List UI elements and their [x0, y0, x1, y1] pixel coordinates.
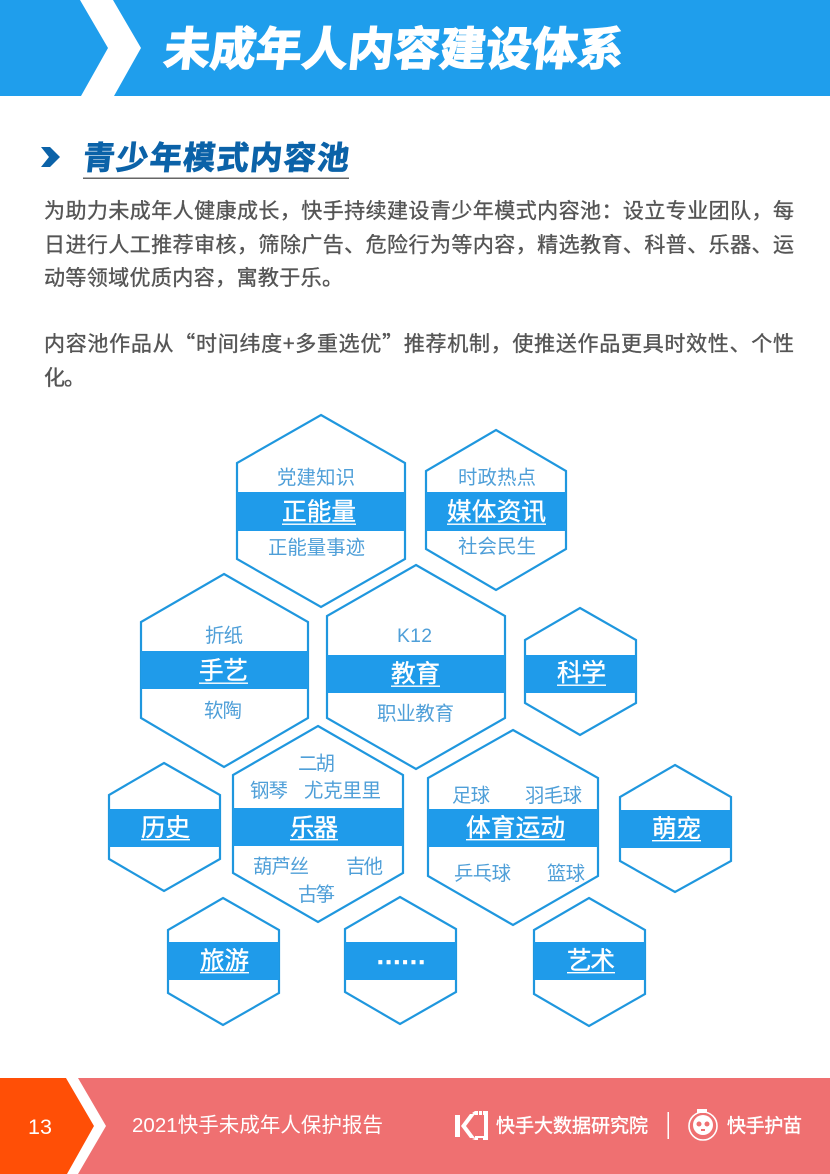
hexagon: 体育运动: 羽毛球	[525, 785, 582, 807]
hexagon: 媒体资讯: 社会民生	[458, 536, 536, 558]
hexagon: 乐器	[233, 726, 403, 922]
section heading	[41, 140, 351, 179]
hexagon: 正能量: 正能量事迹	[268, 537, 365, 559]
intro text block: 化。	[44, 362, 85, 392]
hexagon: 乐器: 乐器	[290, 814, 338, 842]
hexagon: 媒体资讯: 时政热点	[458, 467, 536, 489]
program name: 快手护苗	[727, 1115, 802, 1137]
title: 未成年人内容建设体系	[162, 24, 626, 75]
hexagon: 乐器: 尤克里里	[304, 780, 381, 802]
hexagon: 艺术: 艺术	[567, 947, 615, 975]
hexagon: ellipsis: ......	[377, 943, 425, 970]
intro text block: 日进行人工推荐审核，筛除广告、危险行为等内容，精选教育、科普、乐器、运	[44, 229, 794, 259]
hexagon: 教育: 职业教育	[377, 703, 454, 725]
hexagon: 艺术	[534, 898, 645, 1026]
page number: 13	[28, 1115, 52, 1139]
icon: mascot logo	[689, 1109, 717, 1140]
hexagon: 科学: 科学	[557, 659, 606, 687]
hexagon: 旅游: 旅游	[200, 947, 249, 975]
hexagon: 媒体资讯: 媒体资讯	[447, 498, 546, 526]
hexagon: 历史	[109, 763, 220, 891]
hexagon: 乐器: 钢琴	[250, 780, 288, 802]
intro text block: 动等领域优质内容，寓教于乐。	[44, 262, 343, 292]
hexagon: 体育运动: 足球	[452, 785, 490, 807]
hexagon: 体育运动: 体育运动	[466, 814, 565, 842]
hexagon: 手艺: 折纸	[205, 625, 243, 647]
hexagon: 正能量: 正能量	[282, 498, 356, 526]
hexagon: 手艺	[141, 574, 308, 767]
hexagon: 体育运动: 乒乓球	[454, 863, 511, 885]
hexagon: 乐器: 古筝	[298, 884, 335, 906]
hexagon: 媒体资讯	[426, 430, 566, 590]
icon: chevron	[41, 147, 60, 167]
hexagon: 萌宠	[620, 765, 731, 892]
icon: big data institute logo	[455, 1111, 488, 1140]
hexagon: 体育运动	[428, 730, 598, 925]
section title: 青少年模式内容池	[81, 140, 351, 176]
hexagon: 体育运动: 篮球	[547, 863, 585, 885]
report title: 2021快手未成年人保护报告	[132, 1114, 383, 1137]
hexagon: 正能量	[237, 415, 405, 607]
hexagon: ellipsis	[345, 897, 456, 1024]
institute name: 快手大数据研究院	[496, 1115, 648, 1137]
hexagon: 手艺: 软陶	[204, 700, 242, 722]
hexagon: 教育	[327, 565, 505, 769]
hexagon: 乐器: 二胡	[298, 753, 335, 775]
hexagon: 正能量: 党建知识	[277, 467, 355, 489]
intro text block	[44, 195, 794, 392]
intro text block: 内容池作品从“时间纬度+多重选优”推荐机制，使推送作品更具时效性、个性	[44, 328, 794, 358]
hexagon: 乐器: 葫芦丝	[253, 856, 309, 878]
footer	[0, 1078, 830, 1174]
hexagon: 教育: K12	[397, 625, 432, 647]
hexagon: 科学	[525, 608, 636, 735]
hexagon: 历史: 历史	[141, 814, 190, 842]
header banner	[0, 0, 830, 96]
intro text block: 为助力未成年人健康成长，快手持续建设青少年模式内容池：设立专业团队，每	[44, 195, 794, 225]
hexagon: 教育: 教育	[391, 660, 440, 688]
hexagon: 萌宠: 萌宠	[652, 815, 701, 843]
hexagon: 乐器: 吉他	[346, 856, 383, 878]
hexagon: 旅游	[168, 898, 279, 1025]
hexagon: 手艺: 手艺	[199, 657, 248, 685]
